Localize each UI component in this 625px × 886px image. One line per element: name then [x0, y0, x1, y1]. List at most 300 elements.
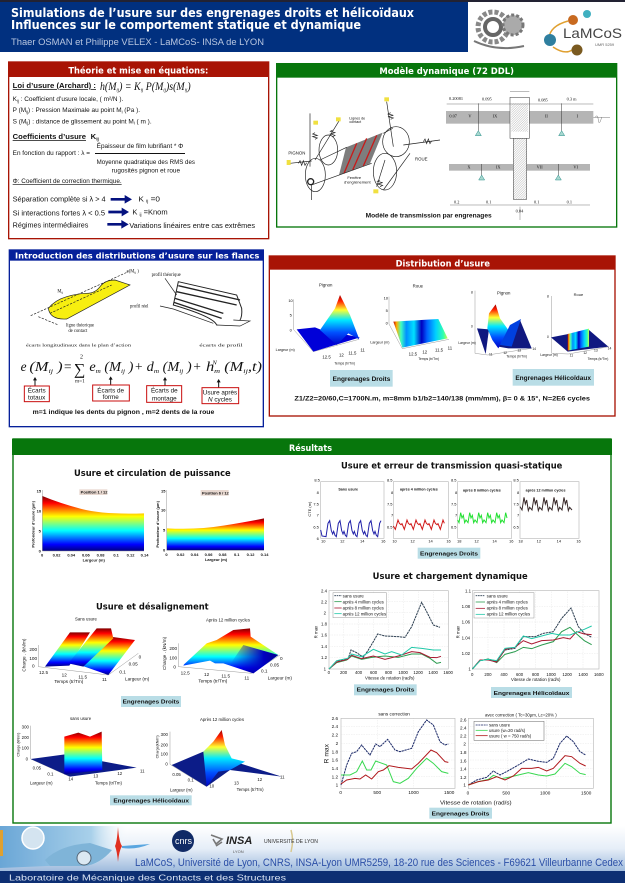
chart: droits 12 million: Largeur (m) — [268, 676, 292, 681]
definitions: ij — [17, 98, 19, 103]
chart: pignon droit: 11.5 — [348, 351, 357, 356]
definitions: ij — [26, 121, 28, 126]
formula — [21, 354, 263, 384]
chart: position 6: 0.08 — [219, 552, 227, 557]
chart: sans correction: 1.4 — [332, 766, 339, 771]
chart: roue droit: Largeur (m) — [370, 340, 389, 344]
tooth profile diagram: profil théorique — [152, 273, 181, 278]
chart: 8 million: 12 — [474, 539, 480, 544]
chart: 8 million: après 8 million cycles — [463, 489, 501, 493]
heading: distribution: Distribution d’usure — [396, 260, 490, 270]
chart: sans correction: 2.6 — [332, 716, 339, 721]
chart: droits: 200 — [340, 670, 348, 675]
chart: position 6: Largeur (m) — [205, 557, 228, 562]
Archard law: ) = K — [118, 81, 142, 93]
chart: roue helicoidal: 11 — [570, 354, 573, 358]
chart: sans usure: Sans usure — [338, 488, 358, 492]
footer strip — [0, 871, 625, 883]
chart: position 1: 0 — [41, 553, 44, 558]
chart: helicoidaux: Vitesse de rotation (rad/s) — [511, 677, 561, 682]
shaft diagram: VII — [537, 165, 543, 170]
formula term callouts: N cycles — [208, 396, 232, 403]
chart: droits sans usure: 200 — [29, 647, 38, 652]
chart: sans usure — [307, 478, 386, 544]
chart: droits sans usure: 0.05 — [129, 662, 138, 667]
chart: helicoidaux: 400 — [500, 672, 508, 677]
chart: helicoidaux 12 million: Largeur (m) — [170, 788, 193, 793]
section: desalignement — [16, 602, 292, 805]
chart: droits 12 million: 11.5 — [221, 673, 230, 678]
chart: helicoidaux 12 million: 100 — [161, 752, 168, 757]
logo: INSA: INSA — [226, 835, 252, 847]
chart: droits 12 million: Temps (tr/Tm) — [198, 678, 228, 683]
chart: sans usure: CTE (m) — [307, 501, 312, 517]
chart: avec correction: avec correction ( Tc=30µm, Lc=20% ) — [485, 713, 557, 718]
regimes: Séparation complète si λ > 4 — [13, 194, 106, 203]
chart: helicoidaux sans usure: 14 — [68, 777, 74, 782]
chart: helicoidaux sans usure: 13 — [93, 774, 99, 779]
chart: roue droit: 11.5 — [435, 347, 444, 352]
formula: h — [206, 359, 213, 374]
formula: ij — [243, 368, 248, 375]
chart: helicoidaux 12 million — [155, 717, 285, 793]
chart: roue helicoidal: 0 — [547, 335, 549, 339]
chart: roue droit: 11 — [448, 345, 453, 350]
chart: roue helicoidal: 14 — [608, 346, 612, 350]
chart: droits: 2 — [324, 610, 327, 615]
chart: droits sans usure: 0 — [139, 654, 142, 659]
chart: droits: Vitesse de rotation (rad/s) — [365, 676, 415, 681]
chart: position 6: 0.06 — [205, 552, 213, 557]
chart: position 6: 0.14 — [261, 552, 269, 557]
Archard law: Loi d’usure (Archard) : — [13, 81, 96, 90]
chart: avec correction: 2.6 — [460, 717, 467, 722]
section: erreur de transmission — [307, 462, 582, 559]
formula: + — [193, 359, 201, 374]
label: droits: Engrenages Droits — [333, 377, 391, 383]
chart: pignon helicoidal: 12 — [503, 351, 507, 355]
chart: helicoidaux 12 million: Charge(kN/m) — [155, 735, 159, 758]
chart: 12 million: 6.5 — [513, 524, 520, 529]
section: circulation de puissance — [31, 469, 269, 563]
formula: ∑ — [74, 361, 85, 378]
chart: position 1: 0.14 — [141, 553, 149, 558]
chart: pignon droit — [276, 283, 365, 366]
logo: CNRS — [172, 830, 194, 852]
chart: roue droit — [370, 283, 453, 361]
chart: helicoidaux: 1.02 — [462, 651, 471, 656]
chart: pignon helicoidal: 14 — [532, 347, 536, 351]
shaft diagram — [446, 92, 610, 220]
gear mesh diagram: ROUE — [415, 157, 428, 162]
chart: pignon droit: 10 — [288, 298, 294, 303]
arrow — [111, 195, 132, 204]
regimes: K — [132, 208, 137, 217]
panel: distribution d'usure — [269, 256, 615, 416]
chart: droits 12 million: 100 — [169, 655, 178, 660]
chart: 4 million: 8.5 — [387, 478, 393, 483]
chart: droits 12 million — [162, 618, 292, 683]
chart: position 1: 0.1 — [113, 553, 120, 558]
label: helicoidaux: Engrenages Hélicoïdaux — [113, 799, 190, 805]
chart: pignon droit: 12.5 — [322, 354, 331, 359]
title: Influences sur le comportement statique et dynamique — [11, 17, 361, 32]
chart: droits 12 million: 0 — [280, 656, 283, 661]
formula: (M — [220, 359, 244, 374]
footer — [0, 826, 625, 883]
definitions: S (M — [13, 118, 27, 125]
chart: roue helicoidal: 12 — [583, 351, 587, 355]
label: helicoidaux — [110, 795, 192, 805]
chart: helicoidaux 12 million: 0 — [165, 762, 168, 767]
chart: helicoidaux 12 million: 11 — [280, 774, 285, 779]
shaft diagram: 0.20081 — [449, 96, 463, 101]
chart: droits sans usure: 11.5 — [78, 674, 87, 679]
label: helicoidaux — [491, 687, 572, 698]
chart: helicoidaux: 1.1 — [465, 588, 472, 593]
yellow flank diagram: ligne théorique — [66, 323, 94, 328]
shaft diagram: V — [468, 113, 472, 118]
chart: pignon helicoidal: Pignon — [497, 290, 511, 295]
chart: position 1: 0.04 — [67, 553, 76, 558]
gear mesh diagram: Lignes de — [349, 116, 365, 120]
heading: desalignement: Usure et désalignement — [96, 602, 209, 613]
label: helicoidaux — [513, 369, 594, 386]
regimes: ij — [146, 199, 148, 204]
chart: roue helicoidal: Temps (tr/Tm) — [588, 357, 608, 361]
Archard law: ij — [185, 88, 188, 94]
chart: position 1: Profondeur d’usure (µm) — [31, 500, 36, 548]
chart: avec correction: 1000 — [540, 791, 551, 796]
chart: sans correction: 1 — [336, 783, 339, 788]
chart: helicoidaux sans usure — [16, 716, 145, 786]
chart: helicoidaux: sans usure — [487, 593, 508, 598]
tooth profile diagram — [130, 273, 250, 326]
chart: helicoidaux sans usure: 200 — [22, 735, 29, 740]
axis title: Vitesse de rotation (rad/s) — [440, 800, 512, 806]
heading: dynamique: Usure et chargement dynamique — [373, 572, 528, 582]
label: droits — [418, 548, 480, 559]
chart: sans correction: R max — [324, 743, 331, 763]
chart: helicoidaux: après 4 million cycles — [487, 599, 528, 604]
definitions: ( m ). — [135, 118, 152, 125]
chart: droits sans usure: Temps (tr/Tm) — [54, 679, 84, 684]
chart: helicoidaux sans usure: 300 — [22, 724, 29, 729]
chart: position 1: 15 — [37, 488, 42, 493]
chart: 4 million: 6.5 — [387, 524, 393, 529]
chart: helicoidaux: 1.08 — [462, 604, 471, 609]
chart: sans correction: 1.6 — [332, 758, 339, 763]
chart: droits: 1.4 — [321, 644, 328, 649]
formula: ij — [179, 368, 183, 375]
chart: position 6: 15 — [161, 488, 166, 493]
formula: = — [64, 359, 72, 374]
formula term callouts: Usure après — [203, 389, 237, 396]
chart: position 6: Profondeur d’usure (µm) — [155, 500, 160, 548]
chart: pignon helicoidal: 8 — [471, 290, 473, 294]
chart: 4 million: 16 — [446, 539, 452, 544]
lambda ratio: Épaisseur de film lubrifiant * Φ — [97, 141, 183, 150]
chart: avec correction: 1.2 — [460, 775, 467, 780]
chart: avec correction: 0 — [467, 791, 470, 796]
formula term callouts: Écarts de — [151, 386, 178, 395]
lambda ratio: rugosités pignon et roue — [112, 167, 180, 174]
chart: sans correction: 2.4 — [332, 724, 339, 729]
shaft diagram: II — [545, 113, 548, 118]
shaft diagram: 0.1 — [534, 199, 539, 204]
chart: sans usure: 12 — [340, 539, 345, 544]
chart: droits sans usure: Sans usure — [75, 617, 97, 622]
Archard law: ) — [187, 81, 191, 93]
shaft diagram: 0.07 — [449, 113, 458, 118]
shaft diagram: X — [467, 165, 471, 170]
chart: helicoidaux 12 million: 300 — [161, 732, 168, 737]
chart: pignon droit: Temps (tr/Tm) — [334, 362, 355, 366]
formula: d — [147, 359, 153, 374]
definitions: : Coefficient d’usure locale, ( m²/N ). — [19, 96, 123, 103]
chart: position 6 — [155, 488, 269, 562]
logo: CNRS: cnrs — [175, 836, 193, 846]
formula term callouts — [24, 376, 239, 404]
formula: (M — [29, 359, 45, 374]
chart: helicoidaux: 1000 — [546, 672, 557, 677]
formula: ij — [49, 368, 53, 375]
label: helicoidaux: Engrenages Hélicoïdaux — [494, 691, 570, 697]
chart: avec correction: 1 — [463, 783, 466, 788]
chart: helicoidaux sans usure: 12 — [117, 771, 123, 776]
chart: sans correction: 2.2 — [332, 732, 339, 737]
definitions: K — [13, 96, 17, 103]
chart: position 1: 5 — [39, 528, 42, 533]
regimes: Variations linéaires entre cas extrêmes — [129, 221, 255, 230]
diagram captions: écarts longitudinaux dans le plan d’action — [26, 342, 132, 347]
chart: position 6: 0 — [163, 548, 166, 553]
chart: sans usure: 7.5 — [313, 502, 320, 507]
chart: roue droit: 5 — [386, 308, 389, 313]
chart: position 1: 0.02 — [53, 553, 61, 558]
gear mesh diagram: d’engrènement — [344, 180, 371, 185]
title: Simulations de l’usure sur des engrenages droits et hélicoïdaux — [11, 5, 414, 20]
yellow flank diagram: ) — [136, 269, 139, 274]
gear mesh diagram: Fenêtre — [347, 175, 362, 180]
gear mesh diagram — [287, 97, 440, 200]
chart: helicoidaux: R max — [455, 625, 460, 638]
label: droits: Engrenages Droits — [123, 700, 179, 706]
heading: theorie: Théorie et mise en équations: — [68, 65, 208, 76]
chart: sans correction: sans correction — [378, 711, 410, 716]
chart: sans correction: 2 — [336, 741, 339, 746]
logo: LaMCoS: LaMCoS — [563, 25, 622, 41]
section: chargement dynamique — [314, 572, 604, 698]
regimes: Régimes intermédiaires — [13, 221, 88, 230]
label: droits: Engrenages Droits — [420, 551, 478, 557]
chart: droits: 1.2 — [321, 655, 328, 660]
footer image — [0, 826, 150, 868]
chart: droits 12 million: Charge . (kN/m) — [162, 636, 167, 670]
label: droits: Engrenages Droits — [357, 688, 414, 694]
chart: pignon helicoidal: 13 — [517, 349, 521, 353]
heading: theorie — [9, 62, 269, 77]
chart: 12 million: 16 — [576, 539, 582, 544]
definitions: i — [134, 121, 135, 126]
chart: helicoidaux sans usure: 11 — [140, 768, 145, 773]
chart: sans correction: 500 — [373, 790, 382, 795]
label: helicoidaux: Engrenages Hélicoïdaux — [515, 376, 592, 382]
chart: 12 million: 8.5 — [513, 478, 520, 483]
chart: helicoidaux 12 million: 10 — [209, 784, 215, 789]
shaft diagram: 0.085 — [538, 97, 548, 102]
chart: helicoidaux 12 million: 12 — [257, 777, 263, 782]
formula: ) — [125, 359, 134, 374]
formula term callouts: totaux — [28, 394, 46, 401]
logo: gears — [474, 12, 524, 48]
chart: helicoidaux: 600 — [516, 672, 524, 677]
chart: droits: 1.8 — [321, 622, 328, 627]
shaft diagram: I — [577, 113, 579, 118]
definitions: ij — [26, 109, 28, 114]
chart: position 1: 0.12 — [127, 553, 135, 558]
formula: ) — [53, 359, 63, 374]
chart: sans usure: 6.5 — [313, 524, 320, 529]
chart: avec correction: usure ( w = 750 rad/s) — [489, 733, 532, 738]
chart: helicoidaux sans usure: 100 — [22, 745, 29, 750]
chart: position 1: 10 — [37, 508, 42, 513]
chart: droits sans usure: 12.5 — [39, 670, 48, 675]
chart: position 1: Largeur (m) — [83, 558, 105, 563]
Archard law: ij — [163, 88, 166, 94]
heading: modele: Modèle dynamique (72 DDL) — [379, 66, 514, 77]
chart: helicoidaux: 1 — [468, 666, 471, 671]
chart: helicoidaux: 1.04 — [462, 635, 471, 640]
yellow flank diagram — [31, 269, 139, 334]
heading: resultats — [12, 439, 612, 455]
formula: m — [154, 368, 159, 375]
chart: helicoidaux: après 8 million cycles — [487, 606, 528, 611]
chart: roue droit: 0 — [386, 321, 389, 326]
chart: sans usure: 8 — [317, 490, 320, 495]
formula: ,t) — [248, 359, 263, 374]
diagram captions — [26, 342, 244, 347]
chart: 12 million: 7.5 — [513, 502, 520, 507]
chart: 4 million: 7 — [391, 513, 394, 518]
Archard law — [13, 81, 191, 94]
header band — [0, 0, 468, 52]
chart: 8 million: 8 — [455, 490, 458, 495]
chart: helicoidaux: après 12 million cycles — [487, 612, 530, 617]
chart: 12 million: 14 — [557, 539, 562, 544]
chart: pignon helicoidal: Largeur (m) — [458, 341, 476, 345]
regimes: =0 — [148, 194, 160, 203]
chart: roue droit: Roue — [413, 283, 424, 288]
chart: avec correction: 1.6 — [460, 758, 467, 763]
chart: droits — [314, 588, 454, 681]
chart: droits 12 million: 0 — [173, 664, 176, 669]
coefficients heading: K — [91, 132, 96, 141]
formula: + — [135, 359, 143, 374]
chart: helicoidaux: 1600 — [594, 672, 604, 677]
chart: pignon droit: 12 — [339, 353, 344, 358]
chart: helicoidaux: 0 — [471, 672, 474, 677]
chart: droits 12 million: Après 12 million cycles — [206, 618, 250, 623]
footer strip: Laboratoire de Mécanique des Contacts et des Structures — [9, 872, 286, 882]
chart: helicoidaux 12 million: Après 12 million cycles — [200, 717, 244, 722]
chart: droits sans usure: Charge . (kN/m) — [21, 638, 26, 672]
formula term callouts: Écarts de — [97, 385, 125, 394]
shaft diagram: 0.1 — [567, 199, 572, 204]
chart: pignon droit: Largeur (m) — [276, 348, 295, 352]
chart: droits: après 8 million cycles — [343, 606, 384, 611]
lambda ratio: Moyenne quadratique des RMS des — [97, 159, 196, 166]
formula: (M — [159, 359, 180, 374]
chart: 12 million: après 12 million cycles — [526, 489, 566, 493]
chart: pignon droit: Pignon — [319, 283, 333, 288]
chart: droits 12 million: 200 — [169, 646, 178, 651]
panel: theorie — [9, 62, 269, 239]
shaft diagram: 0.1 — [486, 199, 491, 204]
chart: 8 million: 7.5 — [451, 502, 457, 507]
chart: droits: après 12 million cycles — [343, 611, 386, 616]
formula term callouts: Écarts — [28, 386, 46, 395]
chart: position 6: 0.04 — [191, 552, 199, 557]
chart: position 6: Position 6 / 12 — [202, 490, 230, 495]
label: droits — [429, 808, 492, 819]
chart: droits 12 million: 0.05 — [270, 663, 279, 668]
chart: roue droit: 12.5 — [409, 351, 418, 356]
chart: helicoidaux: 1.06 — [462, 620, 471, 625]
panel: resultats — [12, 439, 612, 823]
formula: e — [89, 359, 95, 374]
chart: roue droit: 12 — [422, 349, 428, 354]
chart: roue helicoidal: Largeur (m) — [540, 353, 558, 357]
formula: 2 — [80, 354, 83, 360]
Archard law: P(M — [143, 81, 164, 93]
chart: helicoidaux 12 million: 13 — [234, 780, 239, 785]
chart: pignon droit: 5 — [290, 313, 293, 318]
gear mesh diagram: PIGNON — [288, 151, 305, 156]
chart: 12 million: 18 — [518, 539, 524, 544]
chart: position 6: 5 — [163, 528, 166, 533]
chart: helicoidaux: 1200 — [562, 672, 573, 677]
chart: position 1 — [31, 488, 149, 563]
chart: 4 million: après 4 million cycles — [400, 488, 438, 492]
chart: helicoidaux sans usure: Charge (kN/m) — [16, 733, 20, 757]
chart: droits 12 million: 0.1 — [261, 669, 268, 674]
chart: droits: 2.2 — [321, 599, 328, 604]
chart: 4 million — [387, 478, 452, 544]
chart: pignon droit: 11 — [360, 347, 365, 352]
regimes: =Knom — [141, 208, 168, 217]
chart: sans usure: 16 — [381, 539, 386, 544]
chart: droits sans usure: 12 — [62, 673, 67, 678]
chart: helicoidaux — [455, 588, 604, 682]
chart: 8 million: 7 — [455, 513, 458, 518]
chart: sans usure: 10 — [321, 539, 326, 544]
definitions: ) : distance de glissement au point M — [28, 118, 134, 125]
label: droits: Engrenages Droits — [432, 811, 489, 817]
authors: Thaer OSMAN et Philippe VELEX - LaMCoS- INSA de LYON — [11, 37, 264, 47]
panel: modele dynamique — [277, 64, 617, 227]
chart: avec correction: usure (w=20 rad/s) — [489, 728, 526, 733]
chart: pignon helicoidal: 0 — [471, 325, 473, 329]
chart: helicoidaux: 800 — [532, 672, 540, 677]
yellow flank diagram: de contact — [68, 329, 88, 334]
chart: helicoidaux sans usure: 0 — [26, 757, 29, 762]
chart: roue droit: 10 — [384, 295, 389, 300]
chart: sans correction: 1.8 — [332, 749, 339, 754]
chart: pignon helicoidal — [458, 290, 536, 358]
chart: 8 million: 14 — [492, 539, 498, 544]
formula term callouts: forme — [103, 394, 119, 401]
